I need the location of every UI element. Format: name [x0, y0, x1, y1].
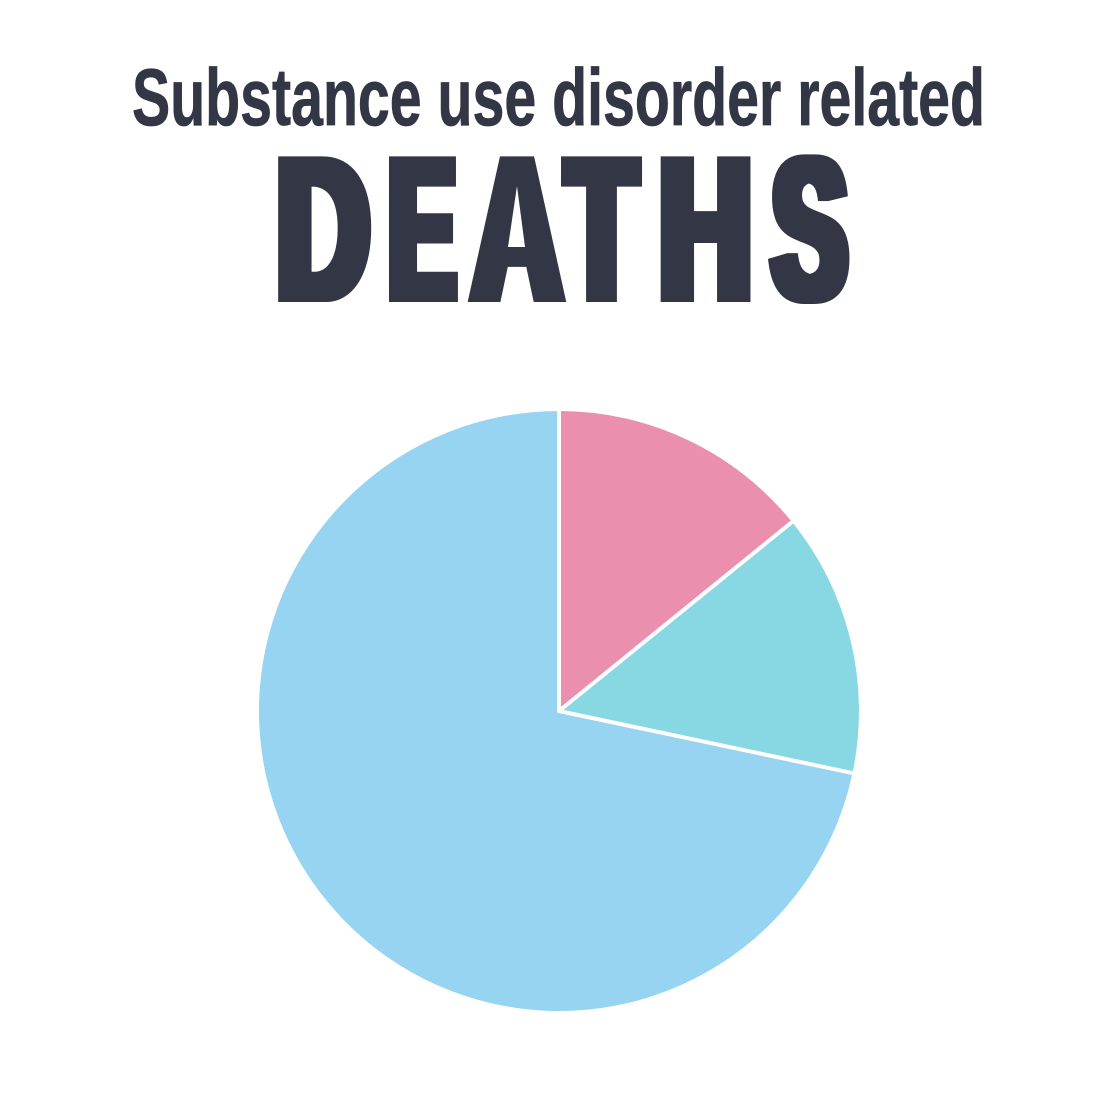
pie chart [259, 408, 859, 1011]
pie slice: pink [559, 411, 792, 711]
title: DEATHS: T [567, 117, 636, 340]
title: DEATHS: A [473, 117, 561, 340]
text: H [660, 117, 751, 340]
pie slice: teal [559, 522, 859, 773]
pie slice: large blue [259, 411, 853, 1011]
title: DEATHS: D [277, 117, 369, 340]
title: DEATHS: E [389, 117, 455, 340]
